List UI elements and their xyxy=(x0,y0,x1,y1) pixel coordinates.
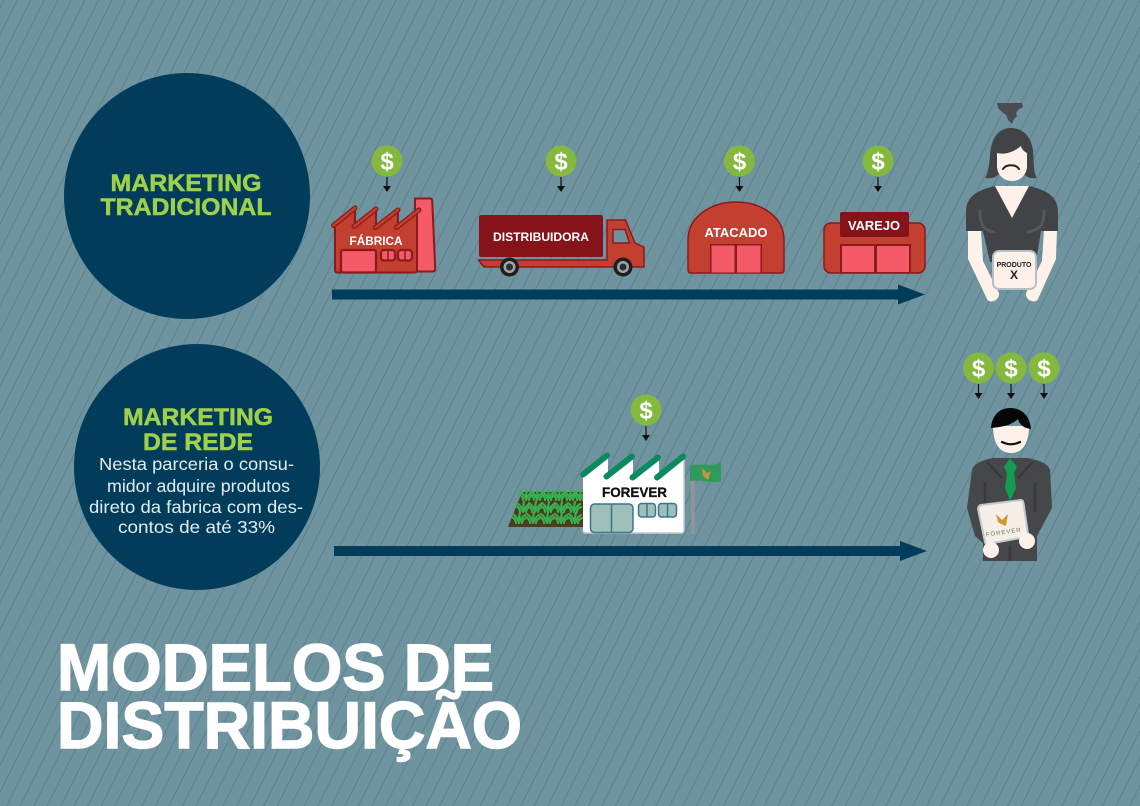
icon: dollar coin fábrica xyxy=(372,146,402,192)
text: marketing de rede description: Nesta parceria o consu- xyxy=(99,454,294,474)
arrow: network chain xyxy=(334,541,927,561)
panel: marketing de rede circle xyxy=(74,344,320,590)
label: fábrica: FÁBRICA xyxy=(350,233,403,248)
label: forever: FOREVER xyxy=(602,484,667,500)
icon: arms xyxy=(968,230,1057,301)
label: produto x: PRODUTO xyxy=(997,262,1032,269)
icon: dollar coin varejo xyxy=(862,146,894,192)
heading: marketing tradicional: TRADICIONAL xyxy=(100,194,272,221)
icon: forever factory xyxy=(583,456,684,533)
icon: happy man with forever box xyxy=(967,408,1052,561)
label: distribuidora: DISTRIBUIDORA xyxy=(493,230,589,244)
icon: dollar coin man 3 xyxy=(1028,352,1060,399)
icon: dollar coin distribuidora: $ xyxy=(554,148,568,176)
icon: dollar coin fábrica: $ xyxy=(380,148,394,176)
icon: dollar coin atacado: $ xyxy=(733,148,747,176)
label: varejo: VAREJO xyxy=(848,218,900,233)
heading: marketing de rede: DE REDE xyxy=(143,429,253,456)
label: produto x: X xyxy=(1010,268,1018,282)
text: marketing de rede description: midor adquire produtos xyxy=(107,476,290,496)
icon: dollar coin man 2: $ xyxy=(1004,356,1018,382)
icon: dollar coin forever: $ xyxy=(639,398,653,424)
arrow: traditional chain xyxy=(332,284,925,304)
icon: dollar coin man 1 xyxy=(963,352,994,399)
label: forever box: FOREVER xyxy=(986,528,1022,538)
icon: dollar coin distribuidora xyxy=(546,146,576,192)
text: marketing de rede description: direto da fabrica com des- xyxy=(89,497,303,517)
title: MODELOS DE xyxy=(57,630,494,704)
panel: marketing tradicional circle xyxy=(64,73,310,319)
icon: dollar coin forever xyxy=(630,394,662,441)
heading: marketing de rede: MARKETING xyxy=(123,404,273,431)
title: DISTRIBUIÇÃO xyxy=(57,688,522,762)
icon: dollar coin atacado xyxy=(724,146,755,192)
icon: truck xyxy=(478,215,644,276)
icon: field of plants xyxy=(508,490,590,527)
label: atacado: ATACADO xyxy=(704,225,768,240)
icon: forever box xyxy=(978,500,1028,544)
text: marketing de rede description: contos de até 33% xyxy=(118,517,275,537)
icon: dollar coin man 1: $ xyxy=(972,356,986,382)
icon: dollar coin man 2 xyxy=(996,352,1026,399)
icon: factory xyxy=(334,198,435,272)
icon: storm cloud xyxy=(997,103,1023,124)
heading: marketing tradicional: MARKETING xyxy=(110,170,262,197)
icon: forever flag xyxy=(690,462,721,534)
icon: dollar coin man 3: $ xyxy=(1037,356,1051,382)
icon: atacado warehouse xyxy=(688,202,784,273)
icon: varejo store xyxy=(824,212,925,273)
icon: unhappy woman with product xyxy=(966,103,1058,301)
icon: dollar coin varejo: $ xyxy=(871,148,885,176)
